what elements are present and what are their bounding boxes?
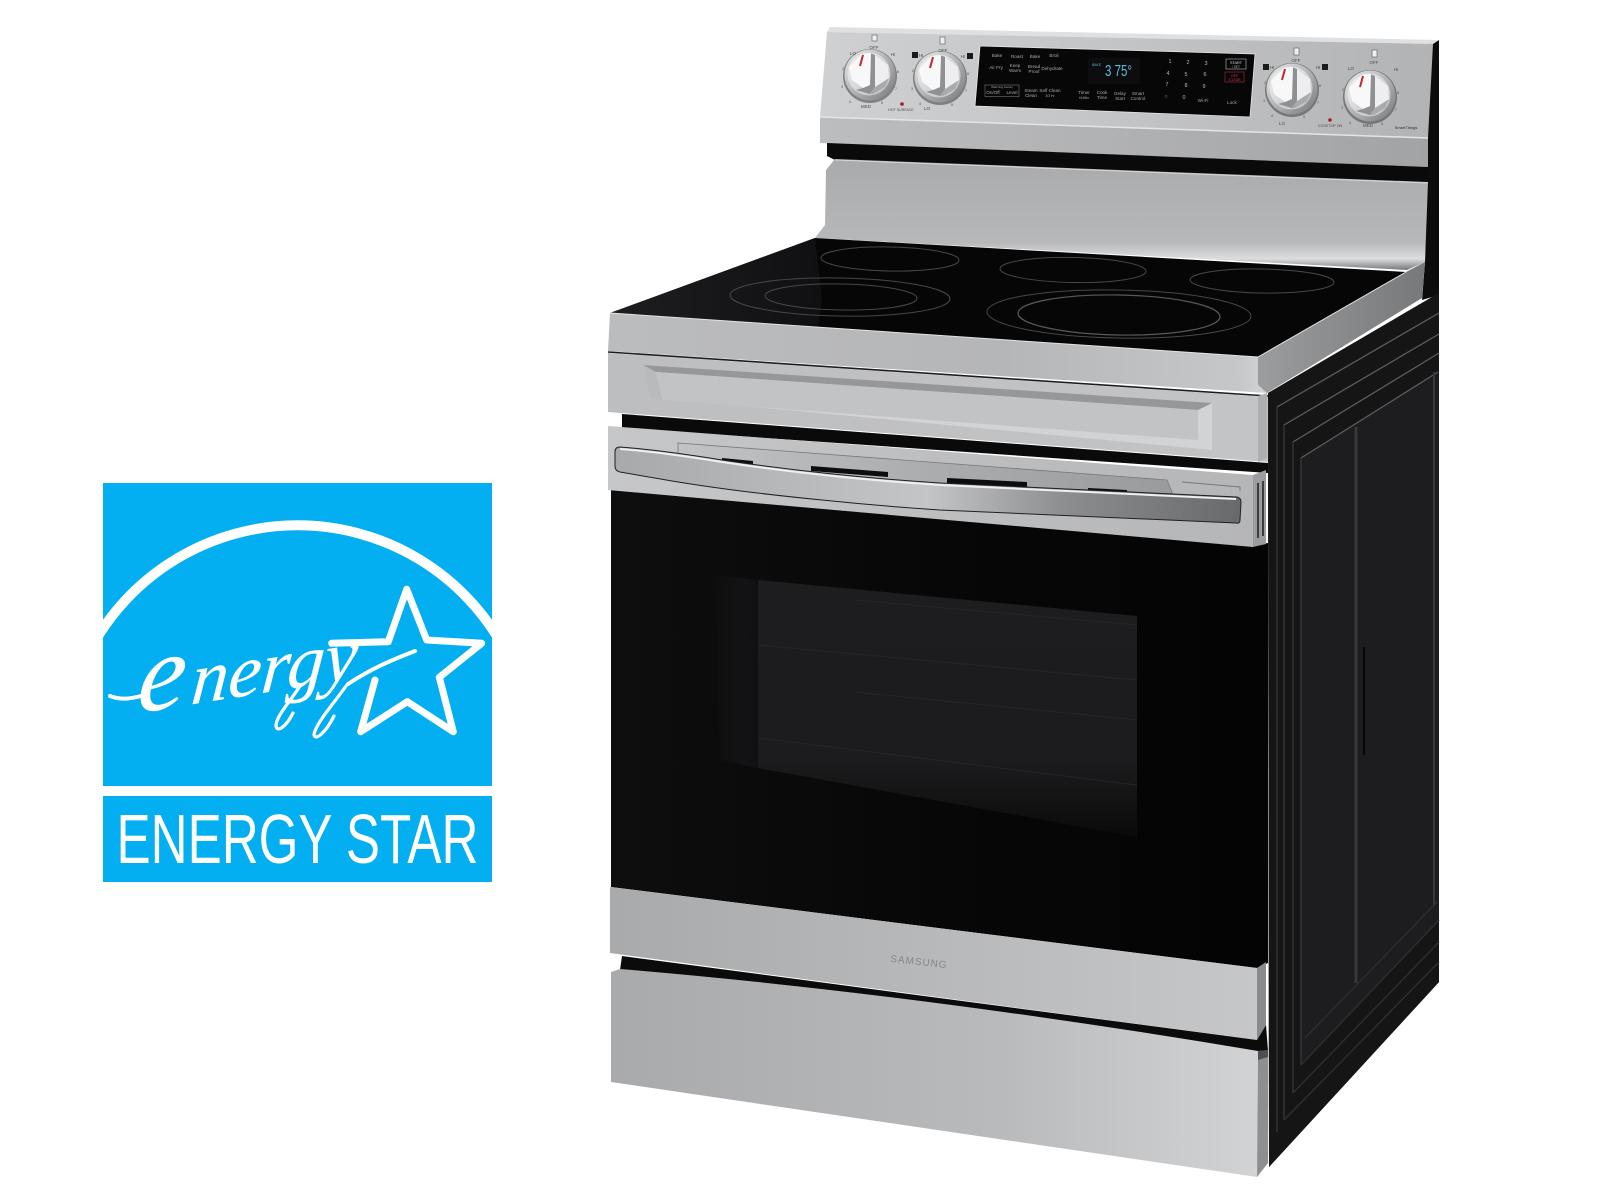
display glass [975, 46, 1255, 117]
knob scale labels: HI [919, 53, 923, 58]
cooktop side trim [1258, 262, 1425, 393]
door handle [615, 447, 1241, 523]
small trim line [1182, 482, 1240, 491]
drawer gap [620, 956, 1268, 1052]
backguard [815, 159, 1428, 270]
panel face [820, 32, 1433, 138]
side panel [1268, 293, 1439, 1167]
keypad: 1 [1168, 59, 1172, 65]
keypad: Wi-Fi [1198, 98, 1208, 103]
backguard top highlight [835, 160, 1428, 183]
display labels: Warming Center [991, 85, 1013, 89]
knob scale labels: LO [1348, 66, 1354, 71]
display labels: Broil [1049, 53, 1059, 58]
oven window glow [715, 575, 758, 768]
black gap above door [622, 414, 1268, 473]
display labels: Steam [1024, 88, 1038, 93]
off clear button [1225, 72, 1244, 82]
black gap under control panel [827, 143, 1428, 183]
display labels: Roast [1011, 54, 1024, 59]
door top band [608, 426, 1266, 547]
display labels: Cook [1097, 90, 1108, 95]
door band side [1253, 470, 1266, 547]
handle recess [678, 443, 1172, 500]
side embossed ribs [1277, 313, 1439, 1132]
knob scale labels: HI [891, 52, 895, 57]
oven temperature readout: BAKE [1092, 63, 1102, 67]
knob right 1 [1263, 63, 1322, 119]
display labels: Clean [1025, 93, 1037, 98]
display labels: Bake [992, 53, 1003, 58]
start button: / SET [1232, 65, 1240, 69]
start button: START [1230, 61, 1243, 65]
display labels: Time [1097, 95, 1107, 100]
knob scale labels: HI [961, 54, 965, 59]
handle highlight [620, 449, 1236, 499]
display labels: Bread [1028, 64, 1041, 69]
panel side facet [1258, 393, 1267, 462]
display labels: Keep [1010, 63, 1021, 68]
knob scale labels: HI [1316, 65, 1320, 70]
keypad: 5 [1184, 72, 1188, 78]
logo script word energy: energy [134, 582, 365, 737]
side outer frame [1268, 293, 1439, 1167]
display labels: Proof [1029, 69, 1040, 74]
keypad: 3 [1204, 61, 1208, 67]
side vent slots [1257, 483, 1259, 538]
logo script flourishes [110, 651, 415, 699]
start button [1226, 59, 1246, 69]
storage drawer [611, 969, 1268, 1177]
display labels: 2/3 Hr [1045, 94, 1055, 98]
display labels: Air Fry [989, 65, 1003, 70]
cooktop on indicator [1318, 118, 1343, 128]
trim highlight [610, 272, 1406, 357]
knob scale labels: MED [861, 104, 872, 109]
door black glass [611, 490, 1268, 968]
oven temperature readout: 3 75° [1105, 63, 1132, 80]
cooktop glass [610, 238, 1406, 357]
vent inner face [656, 372, 1198, 440]
keypad: 6 [1204, 72, 1206, 78]
display labels: Level [1007, 90, 1017, 95]
display labels: Dehydrate [1041, 66, 1063, 71]
display labels: Timer [1078, 90, 1090, 95]
knob left 2 [911, 51, 970, 107]
knob scale labels: OFF [869, 45, 879, 50]
burners [730, 246, 1334, 340]
logo upper blue panel [103, 483, 492, 786]
display labels: Control [1131, 96, 1145, 101]
lower door strip [610, 887, 1266, 1040]
upper front panel [608, 352, 1268, 462]
Energy Star logo [90, 483, 505, 882]
logo star outline [332, 589, 482, 732]
logo wordmark: ENERGY STAR [116, 800, 478, 878]
knob scale labels: LO [924, 106, 930, 111]
logo descender loops [276, 686, 346, 737]
cooktop front trim [608, 313, 1267, 393]
display labels: Bake [1030, 54, 1041, 59]
panel lower band [820, 117, 1428, 167]
oven temperature readout [1088, 58, 1140, 84]
logo lower blue panel [103, 796, 492, 882]
smartthings label: SmartThings [1395, 125, 1417, 130]
off clear button: OFF [1231, 74, 1239, 78]
recessed vent bevel [643, 365, 1212, 450]
knob scale labels: OFF [938, 48, 948, 53]
knob scale labels: LO [1279, 121, 1285, 126]
control panel [820, 27, 1439, 167]
keypad: 4 [1166, 71, 1170, 77]
side slot [1363, 647, 1365, 755]
back black strip [1422, 40, 1439, 300]
keypad [1164, 59, 1238, 105]
display labels: On/Off [986, 90, 1000, 95]
hot surface indicator [888, 102, 914, 112]
keypad: ○ [1164, 94, 1168, 100]
keypad: 8 [1184, 83, 1188, 89]
display labels: Self Clean [1039, 88, 1061, 93]
knob left 1 [841, 49, 900, 105]
display labels [985, 53, 1145, 101]
display labels: Delay [1114, 91, 1127, 96]
knob scale labels: OFF [1291, 58, 1301, 63]
knob scale labels [850, 35, 1398, 128]
display labels: Smart [1132, 91, 1145, 96]
keypad: 0 [1182, 95, 1186, 101]
keypad: 7 [1166, 82, 1168, 88]
knob scale labels: OFF [1369, 60, 1379, 65]
panel crease highlight [820, 117, 1428, 138]
cooktop on indicator: COOKTOP ON [1318, 124, 1343, 128]
keypad: Lock [1227, 100, 1238, 105]
off clear button: /CLEAR [1228, 78, 1241, 82]
display labels: Warm [1009, 68, 1021, 73]
display labels: Start [1115, 96, 1126, 101]
oven window [758, 580, 1137, 837]
vent slots [722, 458, 1127, 492]
panel top edge [827, 27, 1439, 44]
knob scale labels: MED [1363, 123, 1374, 128]
knob right 2 [1341, 70, 1400, 126]
display labels: Hr/Min [1079, 96, 1089, 100]
knob scale labels: HI [1394, 67, 1398, 72]
hot surface indicator: HOT SURFACE [888, 108, 914, 112]
oven racks [758, 600, 1137, 785]
glass reflection [610, 238, 822, 328]
logo arc swoosh [103, 520, 492, 638]
electric range [608, 27, 1439, 1177]
knob scale labels: LO [850, 51, 856, 56]
keypad: 2 [1186, 60, 1190, 66]
keypad: 9 [1202, 84, 1206, 90]
brand mark: SAMSUNG [890, 954, 948, 971]
knob scale labels: HI [1270, 65, 1274, 70]
